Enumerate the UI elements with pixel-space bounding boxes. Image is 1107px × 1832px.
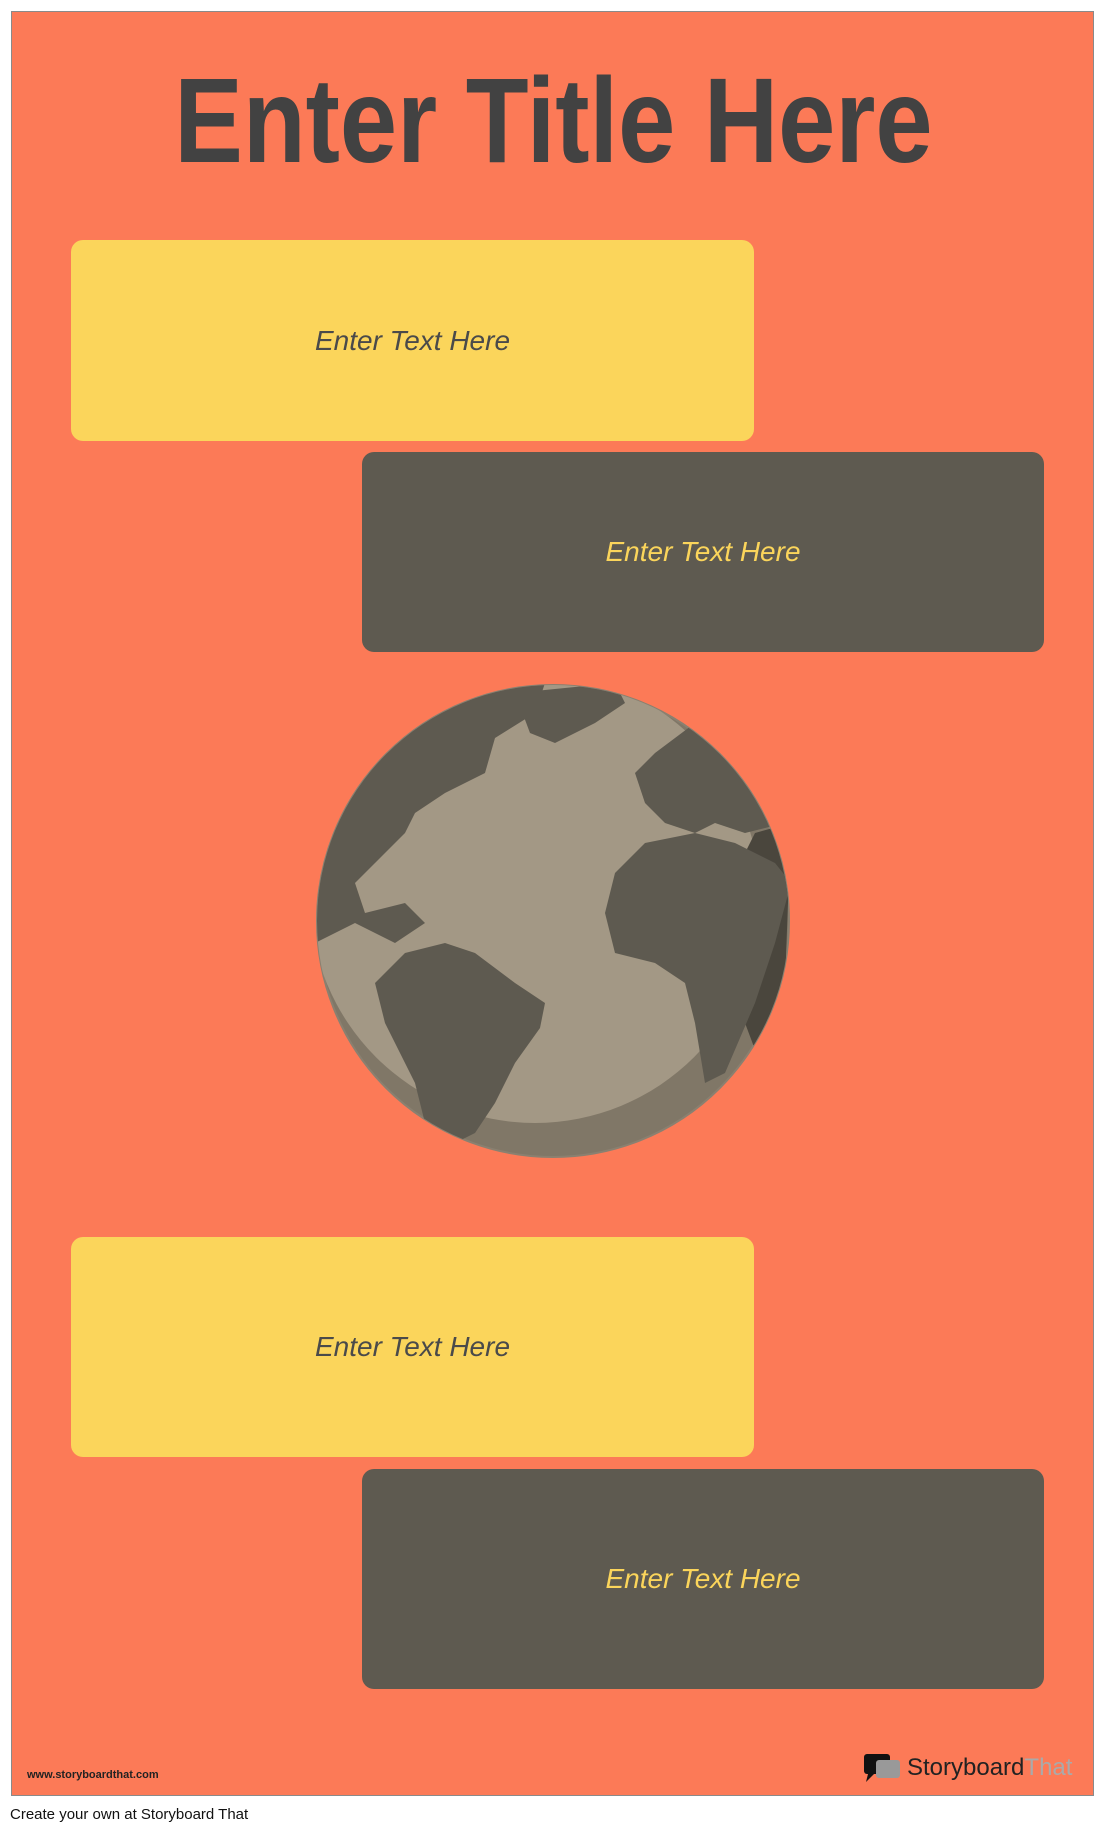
text box 4 bbox=[362, 1469, 1044, 1689]
footer caption: Create your own at Storyboard That bbox=[10, 1806, 248, 1823]
text box 3: Enter Text Here bbox=[315, 1331, 510, 1362]
logo: StoryboardThat bbox=[907, 1754, 1072, 1781]
text box 1 bbox=[71, 240, 754, 441]
text box 1: Enter Text Here bbox=[315, 324, 510, 356]
text box 2 bbox=[362, 452, 1044, 652]
text box 2: Enter Text Here bbox=[605, 536, 801, 567]
text box 4: Enter Text Here bbox=[605, 1563, 801, 1594]
title: Enter Title Here bbox=[174, 52, 933, 188]
footer url: www.storyboardthat.com bbox=[27, 1769, 159, 1781]
icon: globe bbox=[316, 684, 790, 1158]
text box 3 bbox=[71, 1237, 754, 1457]
